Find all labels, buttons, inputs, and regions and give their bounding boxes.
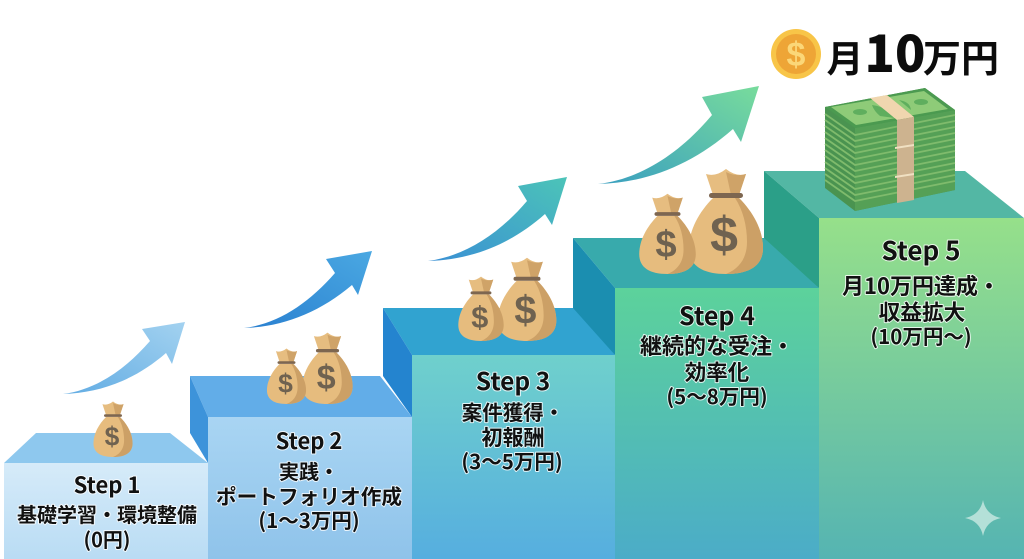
arrow 1 — [63, 322, 185, 394]
icon: money bags step 3 — [458, 258, 556, 341]
title: monthly 100k yen: 月 — [826, 29, 864, 83]
step 4 label: (5〜8万円) — [666, 380, 768, 410]
step 3 label: 初報酬 — [482, 422, 544, 452]
step 2 block — [190, 376, 412, 559]
step 5 label: 収益拡大 — [879, 296, 965, 327]
icon: money bags step 2 — [267, 333, 353, 404]
step 1 label: 基礎学習・環境整備 — [17, 499, 197, 528]
step 4 block — [573, 238, 819, 559]
step 2 label: 実践・ — [279, 456, 339, 485]
step 2 label — [216, 424, 402, 534]
arrow 4 — [598, 86, 759, 184]
step 1 label: Step 1 — [74, 468, 140, 500]
title: monthly 100k yen: 10 — [865, 15, 925, 87]
step 3 block — [383, 308, 615, 559]
step 4 label: 効率化 — [685, 356, 749, 387]
title: monthly 100k yen — [826, 15, 999, 87]
arrow 3 — [428, 177, 567, 261]
step 3 label — [461, 363, 564, 475]
title: monthly 100k yen: 万円 — [923, 28, 999, 83]
step 5 label: 月10万円達成・ — [842, 269, 1000, 301]
step 5 label: (10万円〜) — [870, 320, 972, 350]
step 2 label: Step 2 — [276, 424, 342, 456]
step 5 label — [842, 231, 1000, 350]
icon: gold coin: $ — [787, 36, 806, 74]
icon: stack of cash — [825, 88, 955, 211]
step 2 label: ポートフォリオ作成 — [216, 480, 402, 510]
step 1 label — [17, 468, 197, 553]
step 2 label: (1〜3万円) — [258, 504, 360, 534]
step 4 label: Step 4 — [679, 297, 755, 333]
icon: gold coin — [771, 29, 821, 79]
step 5 block — [764, 171, 1024, 559]
icon: sparkle — [965, 500, 1001, 536]
step 1 label: (0円) — [84, 524, 130, 553]
step 4 label: 継続的な受注・ — [640, 329, 794, 361]
step 1 block — [4, 433, 208, 559]
step 3 label: Step 3 — [476, 363, 550, 398]
arrow 2 — [244, 251, 372, 328]
step 3 label: 案件獲得・ — [462, 396, 564, 426]
step 4 label — [640, 297, 794, 410]
icon: money bags step 4 — [639, 169, 763, 274]
icon: money bag step 1 — [93, 402, 133, 457]
step 3 label: (3〜5万円) — [461, 445, 563, 475]
step 5 label: Step 5 — [882, 231, 960, 268]
